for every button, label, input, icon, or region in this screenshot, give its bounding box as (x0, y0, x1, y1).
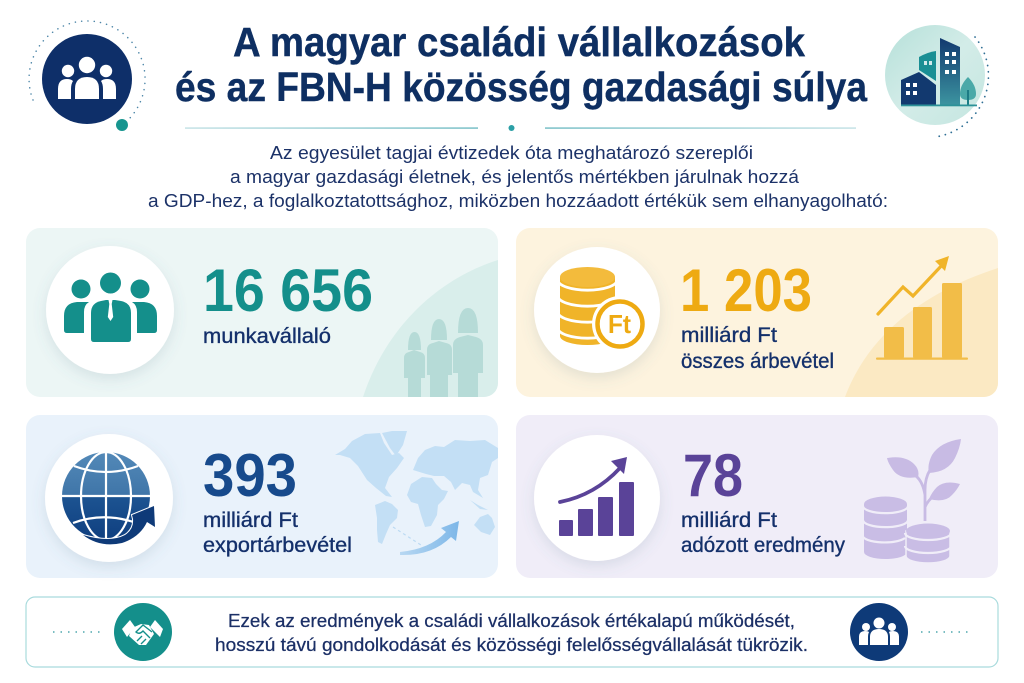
panel: export (26, 415, 498, 578)
header icon: city buildings (885, 25, 988, 137)
icon circle (534, 247, 660, 373)
icon: handshake (114, 603, 172, 661)
intro text: a magyar gazdasági életnek, és jelentős mértékben járulnak hozzá (230, 167, 800, 187)
icon circle (46, 246, 174, 374)
intro text: a GDP-hez, a foglalkoztatottsághoz, miközben hozzáadott értékük sem elhanyagolható: (148, 191, 888, 211)
label: milliárd Ft (681, 324, 777, 347)
label (681, 324, 834, 373)
closing text: Ezek az eredmények a családi vállalkozások értékalapú működését, (228, 610, 795, 631)
left dotted line (53, 631, 105, 633)
panel: profit (26, 415, 998, 667)
title: A magyar családi vállalkozások (233, 19, 805, 65)
icon: team (64, 272, 157, 342)
label: összes árbevétel (681, 350, 834, 373)
label: exportárbevétel (203, 534, 352, 557)
closing text: hosszú távú gondolkodását és közösségi felelősségvállalását tükrözik. (215, 634, 808, 655)
title (175, 19, 868, 110)
icon: community (850, 603, 908, 661)
chart illustration: rising bars (876, 256, 968, 360)
icon circle (534, 435, 660, 561)
header icon: family group (29, 21, 145, 131)
panel: closing statement (26, 597, 998, 667)
label: munkavállaló (203, 325, 331, 348)
divider (185, 125, 856, 131)
title: és az FBN-H közösség gazdasági súlya (175, 64, 868, 110)
label: adózott eredmény (681, 534, 845, 557)
icon: globe with arrow (62, 452, 155, 544)
value: 78 (683, 442, 743, 509)
map arrow (393, 521, 459, 555)
icon: growth bars (559, 457, 634, 536)
label (203, 509, 352, 557)
value: 1 203 (680, 257, 812, 324)
value: 16 656 (203, 257, 373, 324)
intro text (148, 143, 888, 211)
icon: coins with Ft (558, 267, 648, 352)
world map (335, 431, 498, 544)
icon circle (45, 434, 173, 562)
panel: revenue (516, 228, 998, 397)
value: 393 (203, 442, 297, 509)
background silhouettes (404, 308, 483, 397)
label: milliárd Ft (203, 509, 298, 532)
closing text (215, 610, 808, 655)
label: milliárd Ft (681, 509, 777, 532)
panel: employees (26, 228, 498, 397)
right dotted line (921, 631, 972, 633)
intro text: Az egyesület tagjai évtizedek óta meghatározó szereplői (270, 143, 753, 163)
icon: coins with Ft: Ft (608, 309, 631, 339)
label (681, 509, 845, 557)
illustration: plant and coins (863, 439, 961, 563)
